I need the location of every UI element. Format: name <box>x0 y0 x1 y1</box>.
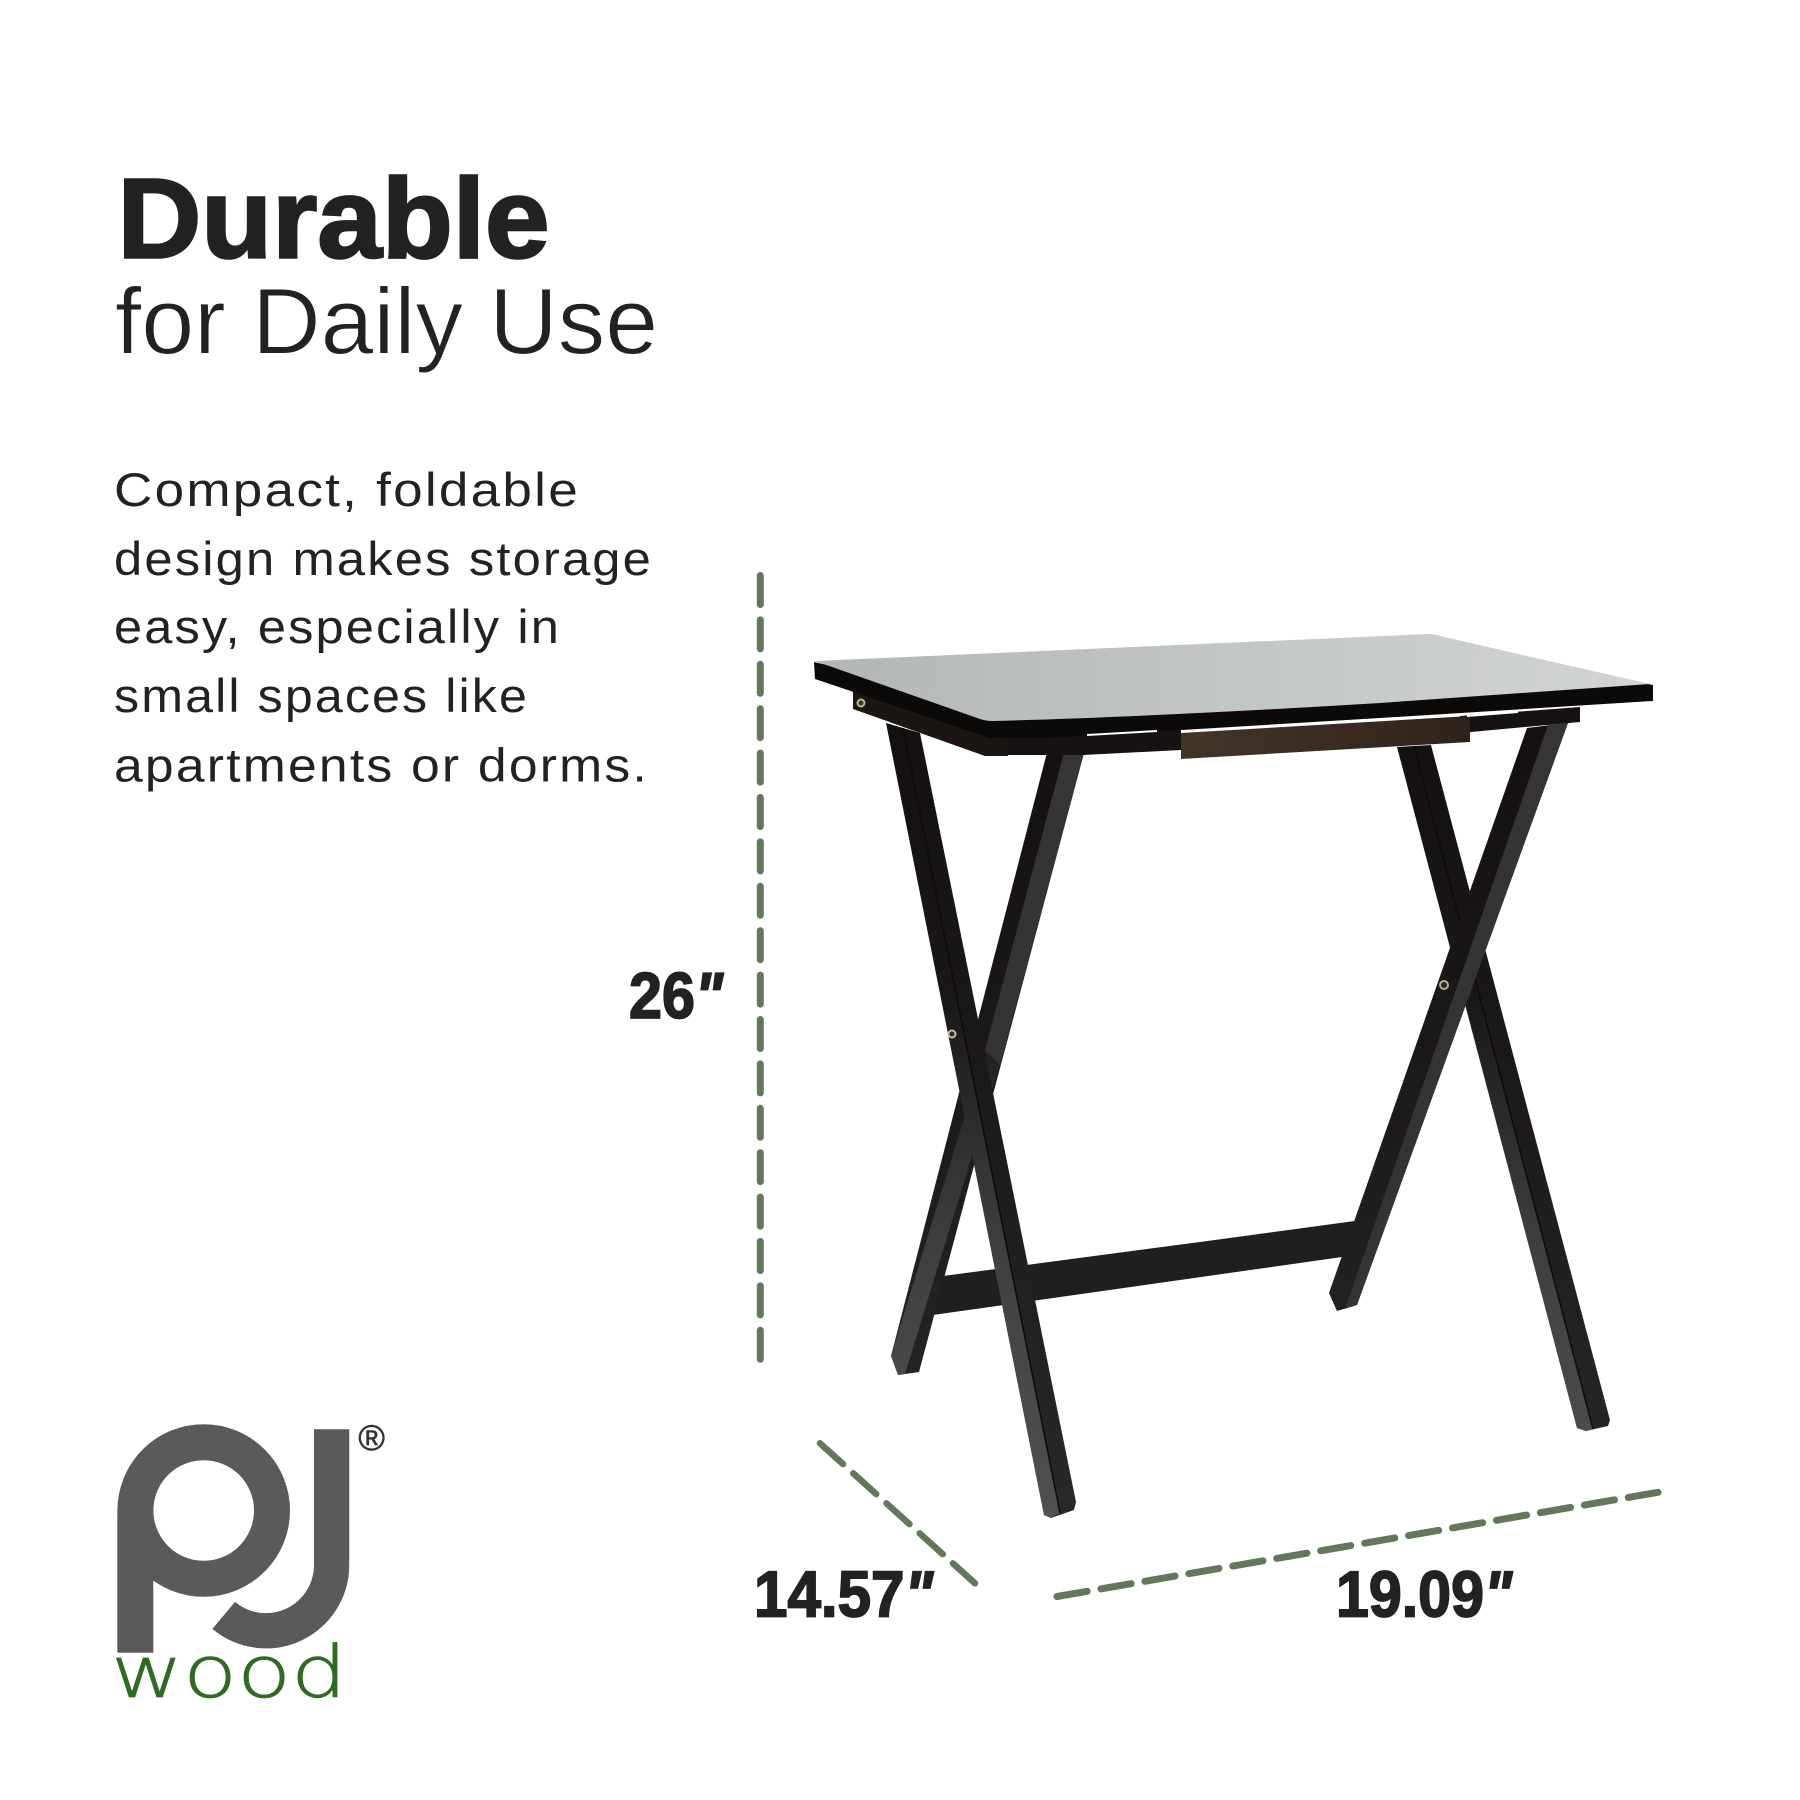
gaps under tabletop <box>1087 711 1518 736</box>
logo word: wood: wood <box>111 1631 347 1714</box>
tabletop surface <box>815 634 1650 721</box>
tabletop edge <box>814 640 1653 738</box>
table leg rear left <box>891 737 1084 1375</box>
rear support bars <box>1007 707 1580 755</box>
table leg front left <box>886 723 1076 1518</box>
dimension label: width: 19.09" <box>1336 1558 1513 1630</box>
dimension line: width <box>1057 1492 1658 1596</box>
dimension line: depth <box>820 1443 975 1583</box>
title line: Durable: Durable <box>118 156 550 282</box>
wood slat <box>1181 716 1470 759</box>
description text block: design makes storage <box>114 532 653 585</box>
logo letter j <box>224 1429 332 1631</box>
title line: for Daily Use: for Daily Use <box>115 268 658 374</box>
left under-bracket <box>853 690 1008 756</box>
dimension line: height <box>757 576 764 1360</box>
description text block <box>114 463 653 792</box>
screw: right pivot <box>1440 981 1448 989</box>
dimension label: depth: 14.57" <box>754 1558 934 1630</box>
dimension label: height: 26" <box>629 959 724 1032</box>
table leg front right <box>1329 723 1568 1311</box>
description text block: small spaces like <box>114 669 529 722</box>
icon: pj wood logo <box>111 1417 385 1714</box>
table leg rear right <box>1397 745 1610 1431</box>
description text block: Compact, foldable <box>114 463 580 516</box>
screw: bracket <box>858 700 864 706</box>
product: folding table <box>814 634 1653 1518</box>
table stretcher bar <box>933 1220 1362 1315</box>
registered mark: ® <box>358 1417 385 1458</box>
screw: left pivot <box>948 1030 956 1038</box>
title <box>115 156 658 374</box>
description text block: apartments or dorms. <box>114 738 649 792</box>
logo letter p <box>117 1442 272 1653</box>
description text block: easy, especially in <box>114 600 561 653</box>
